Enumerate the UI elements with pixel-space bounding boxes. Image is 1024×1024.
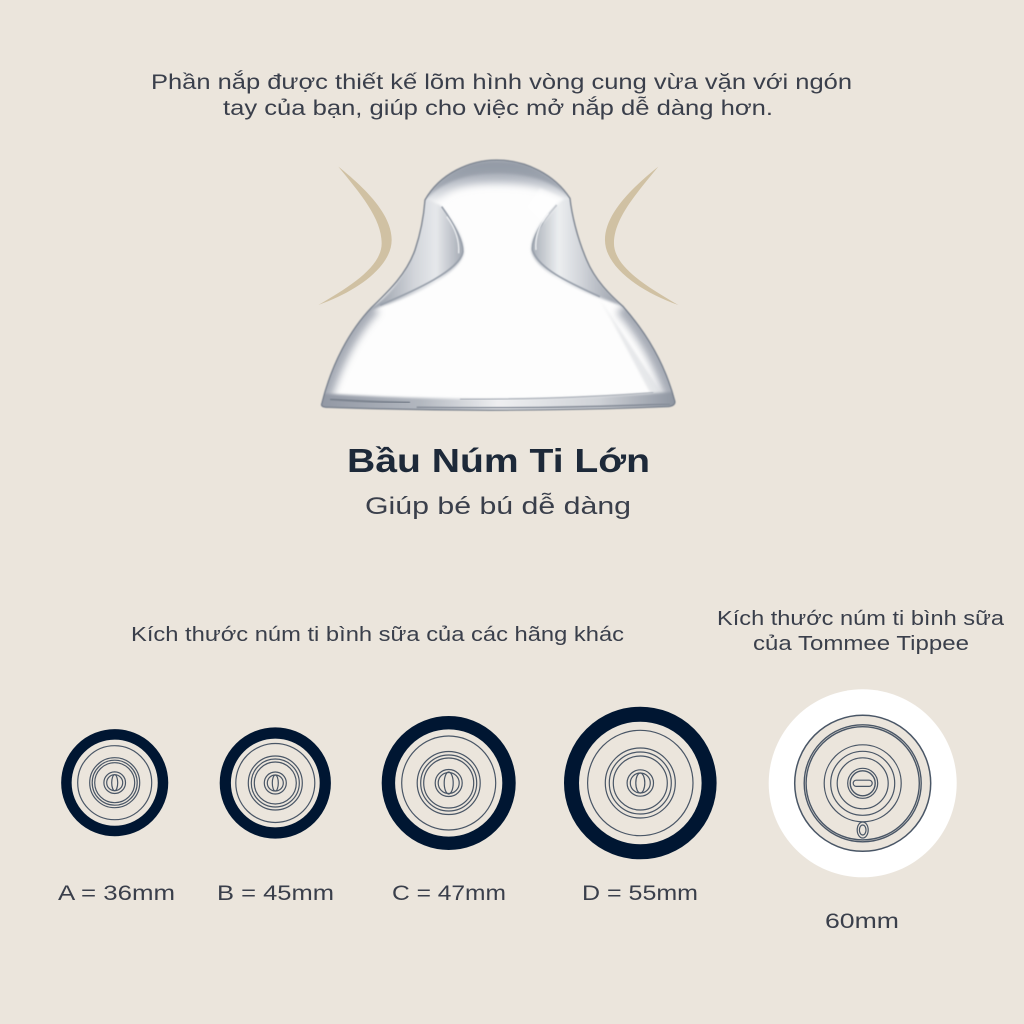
size labels: C = 47mm xyxy=(392,882,506,905)
Tommee Tippee diagram xyxy=(769,689,957,877)
size D diagram xyxy=(572,714,709,852)
right beige arc xyxy=(605,167,678,305)
subheading: Giúp bé bú dễ dàng xyxy=(365,493,631,520)
highlight panel xyxy=(542,204,558,224)
infographic xyxy=(58,70,1004,928)
label: Tommee Tippee xyxy=(717,608,1005,655)
base band xyxy=(322,392,675,410)
teat illustration xyxy=(318,157,678,413)
label: Tommee Tippee: của Tommee Tippee xyxy=(753,633,969,655)
inner folds xyxy=(380,207,463,305)
size C diagram xyxy=(388,723,509,843)
dome shading xyxy=(427,160,568,202)
base rim streaks xyxy=(330,399,410,403)
left beige arc xyxy=(318,167,392,305)
size labels: 60mm xyxy=(825,910,899,933)
left neck shading xyxy=(367,197,463,312)
size B diagram xyxy=(225,733,325,833)
right neck shading xyxy=(532,197,628,310)
lower left edge shading xyxy=(318,305,372,408)
size A diagram xyxy=(66,734,163,831)
size labels xyxy=(58,882,899,933)
top description text: Phần nắp được thiết kế lõm hình vòng cung vừa vặn với ngón xyxy=(151,71,852,94)
top description text xyxy=(151,71,852,120)
lower right edge shading xyxy=(625,305,678,405)
top description text: tay của bạn, giúp cho việc mở nắp dễ dàng hơn. xyxy=(223,97,773,120)
outer edge xyxy=(322,160,675,410)
size labels: B = 45mm xyxy=(217,882,334,905)
size labels: A = 36mm xyxy=(58,882,175,905)
label: other brands: Kích thước núm ti bình sữa của các hãng khác xyxy=(131,624,624,646)
label: Tommee Tippee: Kích thước núm ti bình sữa xyxy=(717,608,1005,630)
heading: Bầu Núm Ti Lớn xyxy=(347,442,650,479)
diagonal facet xyxy=(610,317,660,394)
teat body xyxy=(318,157,678,413)
size labels: D = 55mm xyxy=(582,882,698,905)
